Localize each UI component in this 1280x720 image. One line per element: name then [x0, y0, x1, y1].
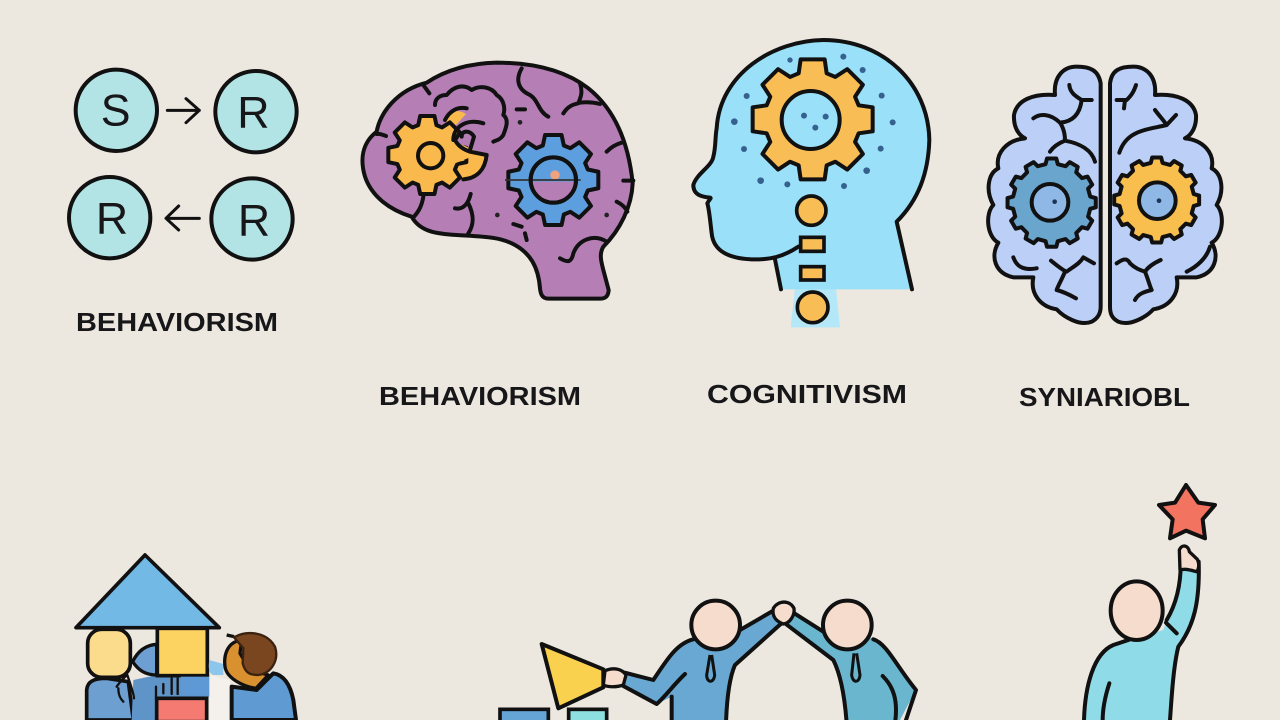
head outline: [693, 40, 929, 289]
ghost gear outline: [435, 86, 507, 142]
head: [1111, 581, 1163, 640]
clasped hands: [773, 602, 794, 624]
arrow right: [167, 99, 199, 123]
blue gear: [495, 120, 609, 225]
blue block: [500, 709, 548, 720]
collar detail: [117, 675, 178, 702]
yellow gear: [388, 108, 487, 194]
white column detail: [209, 675, 230, 720]
circle R bottom left: [69, 177, 150, 258]
hand holding flag: [603, 669, 626, 687]
left person body: [87, 678, 133, 720]
head with hair: [225, 633, 276, 688]
teal block: [569, 709, 607, 720]
panel: stimulus-response diagram: [69, 70, 297, 260]
illustration: person reaching for star: [1084, 485, 1215, 720]
circle S: S: [101, 86, 131, 135]
icon: head with gear: [693, 40, 929, 327]
yellow gear: [1114, 158, 1199, 242]
left person: [623, 601, 787, 720]
icon: two-hemisphere brain with gears: [988, 67, 1222, 323]
blue gear: [1008, 159, 1096, 247]
circle R bottom left: R: [96, 195, 128, 244]
brain creases: [377, 68, 633, 261]
circle R top: [215, 71, 297, 152]
label: behaviorism centre: BEHAVIORISM: [379, 381, 581, 411]
yellow triangle flag: [542, 644, 603, 708]
left hemisphere: [988, 67, 1101, 323]
pale blue hand: [209, 660, 223, 675]
neural dots: [731, 54, 896, 189]
circle R bottom right: [211, 178, 293, 260]
blue cube: [181, 677, 211, 695]
red star: [1159, 485, 1215, 538]
arrow left: [166, 206, 199, 230]
icon: purple brain with gears: [362, 63, 633, 299]
fading neck tab: [791, 288, 840, 327]
body and raised arm: [1084, 567, 1199, 720]
label: cognitivism: COGNITIVISM: [707, 379, 907, 409]
red block: [157, 698, 207, 720]
big yellow gear: [753, 59, 873, 179]
centre blue body: [132, 675, 210, 720]
illustration: two people high five: [500, 601, 917, 720]
circle R bottom right: R: [238, 197, 270, 246]
circle R top: R: [237, 89, 269, 138]
illustration: building blocks team: [76, 555, 296, 720]
right hemisphere: [1110, 67, 1222, 323]
right person body: [232, 673, 296, 720]
roof triangle: [76, 555, 219, 628]
hand pointing: [1179, 546, 1199, 572]
label: behaviorism left: BEHAVIORISM: [76, 307, 278, 337]
circle S: [76, 70, 157, 151]
brain outline: [362, 63, 633, 299]
yellow rounded block: [88, 629, 130, 677]
yellow spine nodes: [797, 196, 828, 323]
right person: [783, 601, 917, 720]
yellow square block: [157, 628, 207, 676]
blue side block: [133, 644, 157, 675]
label: synarioal: SYNIARIOBL: [1019, 382, 1190, 412]
